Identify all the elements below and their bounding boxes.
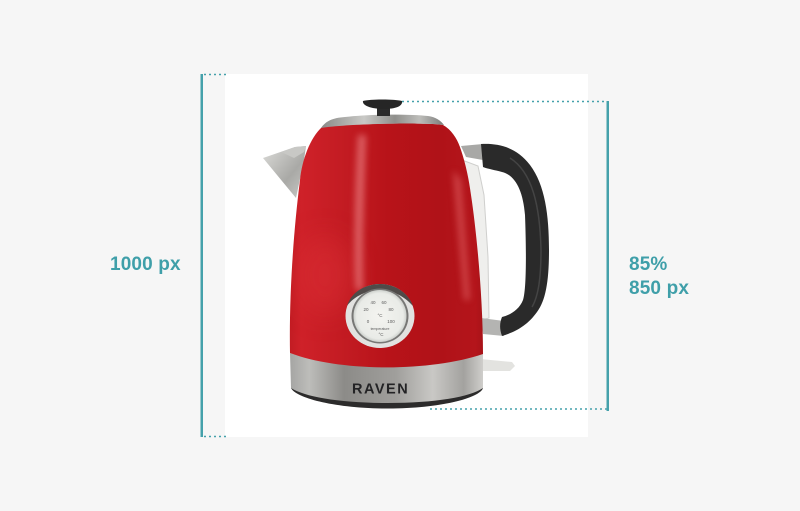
icon: steel base: [290, 353, 483, 408]
icon: kettle spout: [263, 146, 306, 198]
dial numbers: [363, 300, 395, 337]
icon: base shadow rim: [291, 388, 483, 408]
dial numbers: 0: [367, 319, 370, 324]
label: 85% 850 px: 850 px: [629, 278, 689, 299]
dial numbers: °C: [377, 313, 383, 318]
icon: red kettle body: [285, 120, 490, 375]
dial numbers: 100: [387, 319, 395, 324]
dial numbers: 80: [388, 307, 394, 312]
dimension: full height 1000 px: [200, 74, 226, 437]
icon: kettle handle: [461, 144, 549, 336]
white product panel: [225, 74, 588, 437]
icon: thermometer dial: [346, 284, 414, 348]
dial numbers: 40: [370, 300, 376, 305]
dial numbers: 20: [363, 307, 369, 312]
icon: water gauge window: [462, 160, 489, 322]
icon: drip tray tab: [480, 359, 515, 371]
icon: lid knob: [363, 100, 402, 116]
kettle product illustration: [263, 100, 549, 408]
label: 1000 px: 1000 px: [110, 254, 181, 275]
dial numbers: 60: [381, 300, 387, 305]
dimension: product height 85%: [402, 101, 609, 411]
dial numbers: temperature: [371, 327, 389, 331]
icon: lid: [321, 115, 444, 128]
label: 85% 850 px: 85%: [629, 254, 667, 275]
label: 85% 850 px: [629, 254, 689, 299]
brand: RAVEN: RAVEN: [352, 382, 409, 398]
dial numbers: °C: [378, 332, 384, 337]
